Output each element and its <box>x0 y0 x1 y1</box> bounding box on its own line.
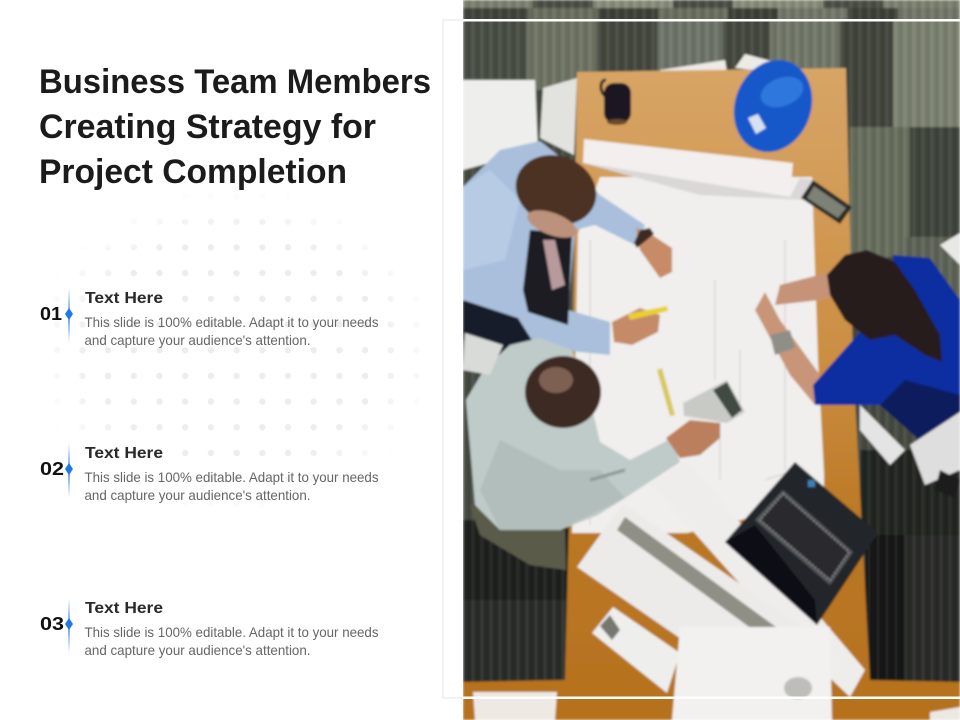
list item 02: 02 <box>40 459 64 479</box>
list item 01: 01 <box>40 304 62 324</box>
table <box>463 68 960 720</box>
list item 02 <box>40 443 378 503</box>
paper bottom <box>473 627 960 720</box>
title: Project Completion <box>39 153 347 191</box>
white frame over photo <box>463 19 960 699</box>
blueprint sheet <box>572 177 824 533</box>
list item 01: and capture your audience's attention. <box>84 332 310 348</box>
list item 03: Text Here <box>85 600 163 617</box>
dotted background pattern <box>58 218 394 482</box>
rolled plans <box>576 516 867 696</box>
helmet <box>732 58 814 154</box>
title: Creating Strategy for <box>39 108 376 146</box>
list item 03: This slide is 100% editable. Adapt it to your needs <box>84 624 378 640</box>
list item 01: Text Here <box>85 290 163 307</box>
rolled paper top <box>581 137 795 178</box>
title <box>39 63 431 191</box>
phone <box>801 180 852 224</box>
list item 02: Text Here <box>85 445 163 462</box>
title: Business Team Members <box>39 63 431 101</box>
blueprint markings <box>590 240 795 525</box>
list item 02: This slide is 100% editable. Adapt it to your needs <box>84 469 378 485</box>
list item 03: 03 <box>40 614 64 634</box>
mug <box>601 80 631 125</box>
woman <box>755 250 960 445</box>
list item 03: and capture your audience's attention. <box>84 642 310 658</box>
list item 01: This slide is 100% editable. Adapt it to your needs <box>84 314 378 330</box>
carpet <box>463 0 960 720</box>
list item 02: and capture your audience's attention. <box>84 487 310 503</box>
man 2 <box>466 338 745 570</box>
man 1 <box>463 141 672 365</box>
list item 01 <box>40 288 378 348</box>
papers top left <box>463 54 775 170</box>
office chairs <box>463 233 960 498</box>
frame outline behind photo <box>443 20 473 698</box>
list item 03 <box>40 598 378 658</box>
laptop <box>725 462 878 625</box>
photo: team around a table <box>463 0 960 720</box>
